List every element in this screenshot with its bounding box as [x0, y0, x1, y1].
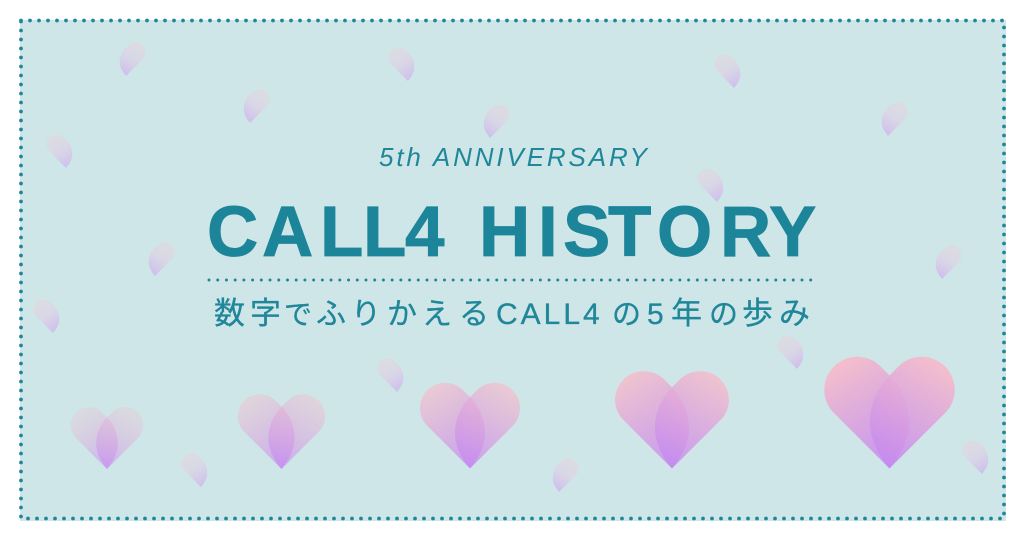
subtitle: で — [284, 299, 312, 330]
heart 3 — [420, 383, 520, 468]
subtitle: る — [459, 298, 489, 331]
subtitle: の — [709, 299, 738, 331]
subtitle: か — [387, 298, 417, 331]
subtitle: 歩 — [742, 296, 773, 331]
anniversary label: 5th ANNIVERSARY — [379, 142, 649, 172]
subtitle: 数 — [214, 296, 245, 331]
heart 5 — [824, 357, 955, 468]
subtitle: え — [422, 298, 452, 331]
subtitle: CALL4 — [496, 298, 603, 331]
subtitle: の — [612, 299, 641, 331]
heart 1 — [71, 407, 143, 469]
falling petals — [33, 42, 988, 492]
heart 4 — [615, 371, 729, 468]
subtitle: 年 — [671, 296, 702, 331]
subtitle: ふ — [316, 298, 346, 331]
subtitle: み — [779, 296, 810, 331]
subtitle: り — [351, 298, 381, 331]
subtitle: 5 — [647, 298, 664, 331]
heart 2 — [238, 394, 325, 469]
main title: CALL4 HISTORY — [207, 193, 816, 272]
dotted divider — [209, 278, 816, 282]
subtitle: 字 — [250, 296, 281, 331]
